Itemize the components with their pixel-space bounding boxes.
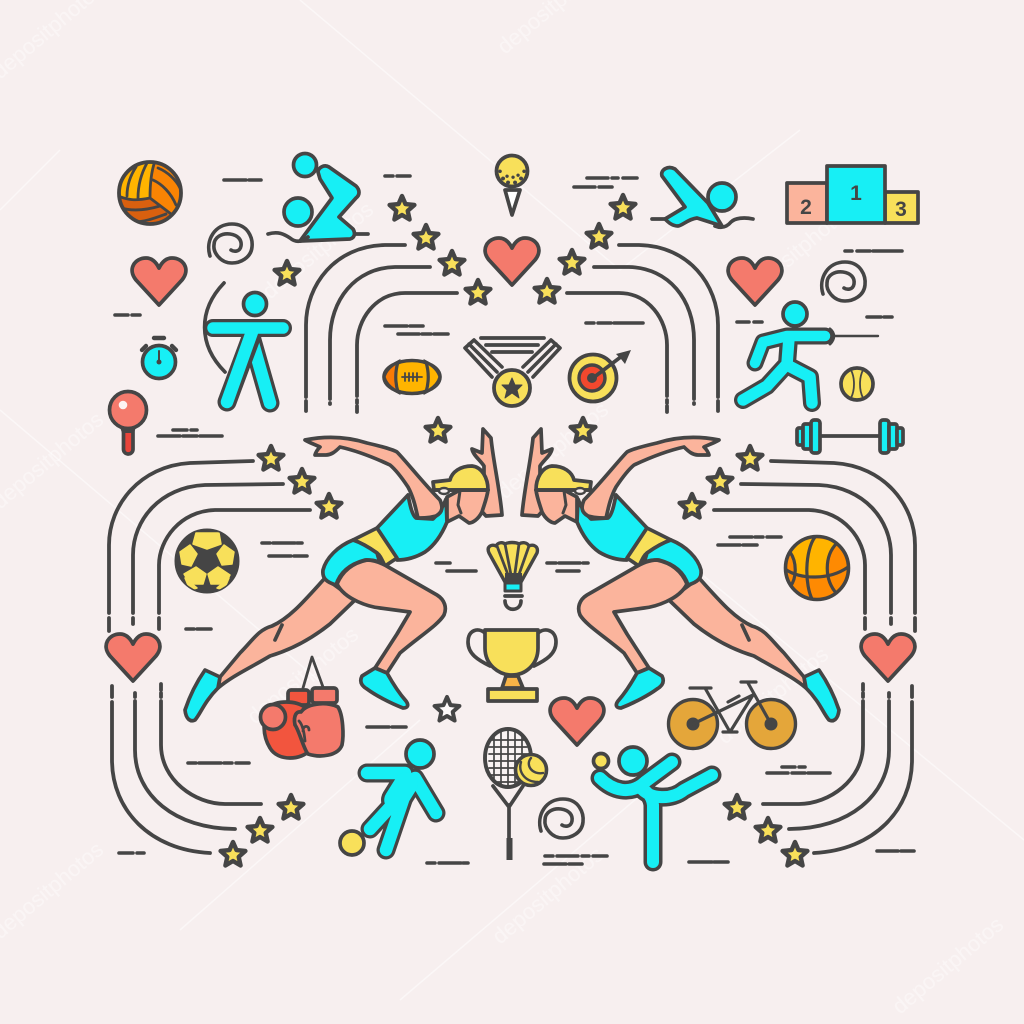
watermark: depositphotos bbox=[712, 642, 833, 749]
icon: shuttlecock bbox=[488, 542, 537, 609]
icon: trophy bbox=[468, 630, 556, 701]
icon: soccer ball bbox=[176, 530, 238, 592]
icon: outline star bbox=[435, 697, 459, 720]
watermark: depositphotos bbox=[257, 197, 378, 304]
icon: barbell bbox=[797, 420, 903, 453]
icon: podium: 1 bbox=[850, 182, 862, 205]
icon: archer bbox=[205, 283, 283, 403]
spirals bbox=[209, 224, 865, 838]
icon: boxing gloves bbox=[260, 657, 343, 758]
cap bbox=[433, 466, 488, 490]
watermark: depositphotos bbox=[887, 912, 1008, 1019]
icon: podium: 2 bbox=[800, 196, 812, 219]
icon: water polo player bbox=[268, 154, 368, 241]
icon: fencer bbox=[743, 302, 878, 403]
waist bbox=[353, 528, 397, 566]
running tracks: right side bbox=[567, 245, 915, 853]
icon: podium bbox=[787, 166, 918, 223]
front shoe bbox=[361, 668, 408, 708]
icon: stopwatch bbox=[142, 338, 176, 378]
watermark: depositphotos bbox=[492, 397, 613, 504]
watermark: depositphotos bbox=[242, 622, 363, 729]
front leg bbox=[337, 560, 445, 673]
shorts bbox=[323, 540, 380, 585]
icon: golf ball on tee bbox=[496, 156, 528, 215]
running tracks: left side bbox=[109, 245, 457, 853]
icon: podium: 3 bbox=[895, 198, 907, 221]
icon: basketball bbox=[785, 536, 848, 601]
back shoe bbox=[185, 670, 220, 721]
icon: ping pong paddle bbox=[110, 392, 146, 454]
back leg bbox=[218, 578, 355, 688]
icon: softball bbox=[841, 368, 873, 400]
stars bbox=[221, 195, 807, 866]
back arm bbox=[472, 429, 502, 516]
front arm bbox=[305, 437, 442, 518]
icon: tennis racket and ball bbox=[485, 729, 546, 860]
icon: target with arrow bbox=[570, 350, 631, 402]
icon: swimmer bbox=[652, 168, 753, 227]
neck and head bbox=[447, 490, 488, 523]
icon: bicycle bbox=[668, 682, 796, 748]
icon: american football bbox=[384, 360, 440, 394]
watermark: depositphotos bbox=[487, 842, 608, 949]
icon: rhythmic gymnast bbox=[594, 747, 712, 862]
icon: medal bbox=[465, 338, 560, 406]
runner: left athlete bbox=[185, 429, 502, 721]
dashed accent lines bbox=[115, 176, 914, 864]
runner: right athlete bbox=[522, 429, 839, 721]
icon: volleyball bbox=[117, 160, 181, 232]
hearts bbox=[106, 238, 915, 745]
watermark: depositphotos bbox=[737, 197, 858, 304]
icon: soccer player kicking bbox=[340, 740, 436, 855]
torso bbox=[377, 495, 447, 560]
